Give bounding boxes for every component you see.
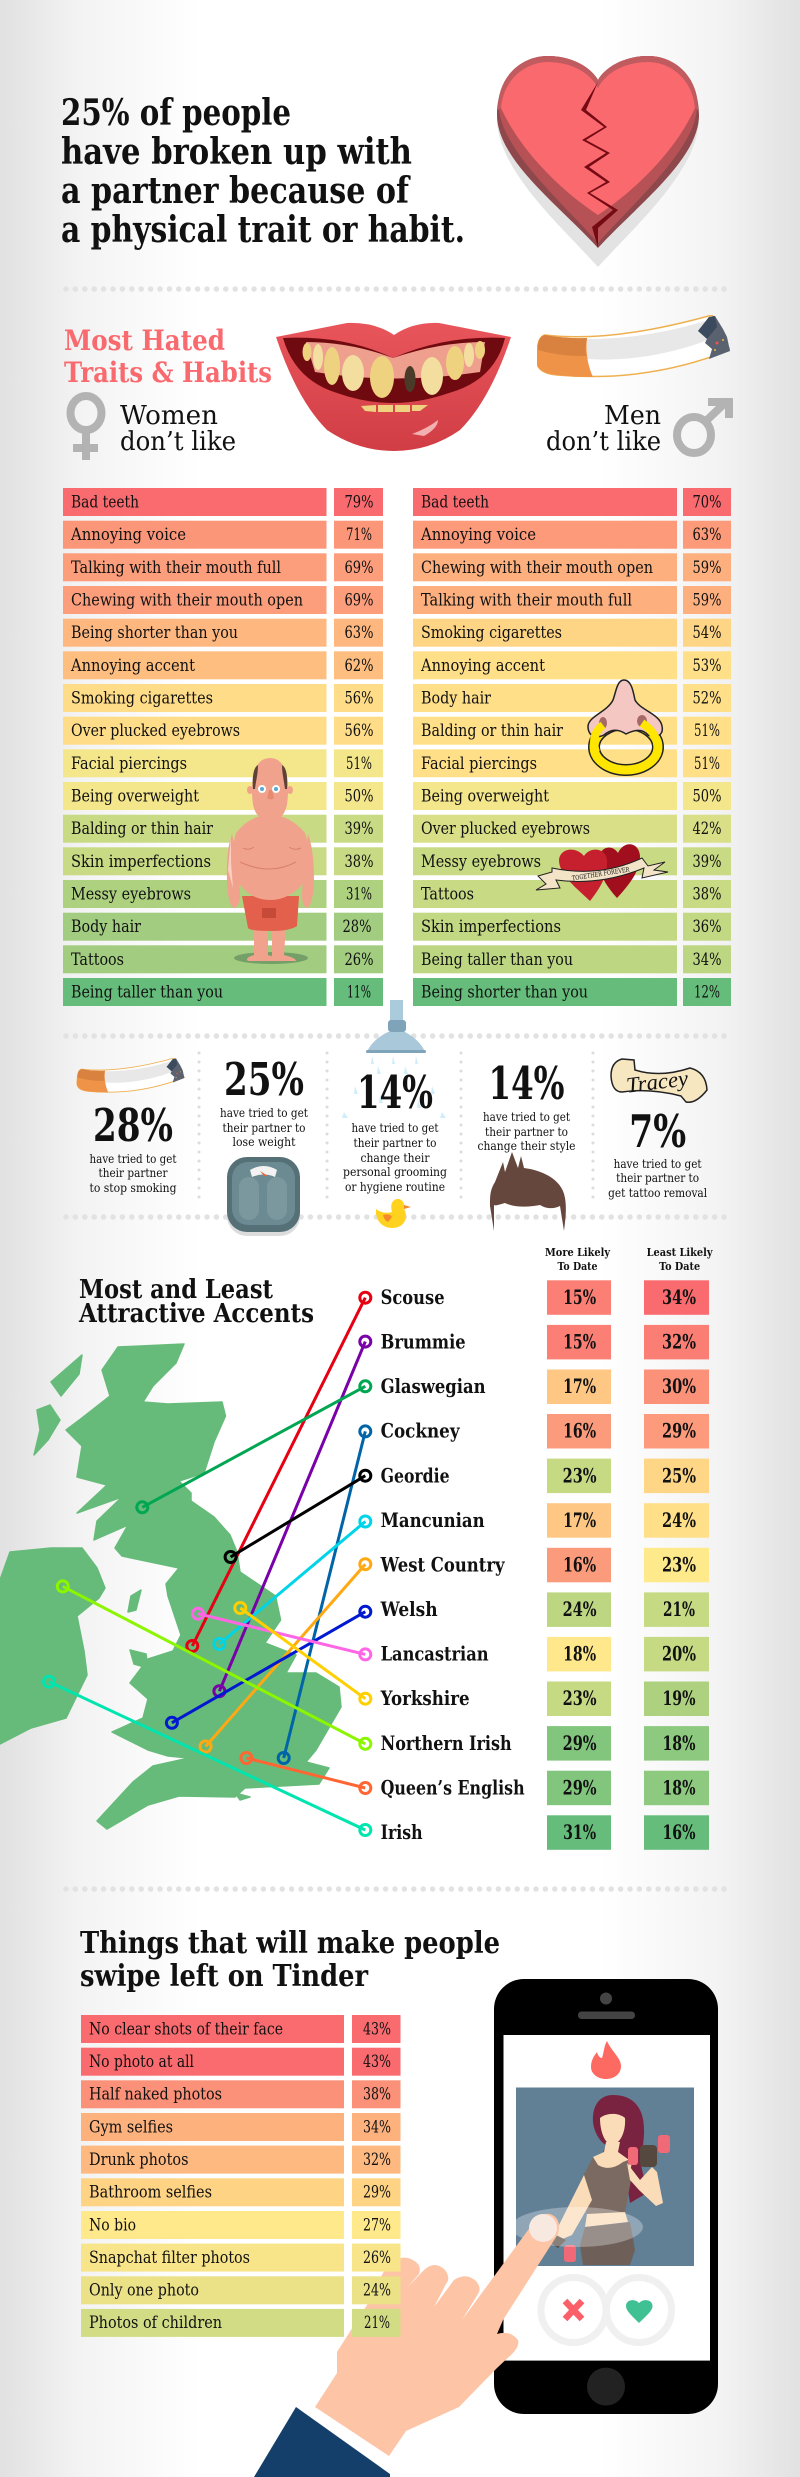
connector: Mancunian: [214, 1516, 371, 1650]
row: 34%: [692, 950, 722, 969]
accent row: Cockney: 16%: [563, 1420, 596, 1443]
row: [81, 2080, 400, 2108]
row: [81, 2146, 400, 2174]
icon: overweight balding man: [227, 758, 314, 964]
row: Balding or thin hair: [421, 721, 563, 740]
accent row: Northern Irish: Northern Irish: [381, 1731, 512, 1755]
row: Bad teeth: [71, 492, 139, 512]
title: have broken up with: [61, 131, 412, 173]
row: 11%: [347, 982, 371, 1002]
accent row: Brummie: 32%: [662, 1331, 696, 1354]
row: Annoying voice: [70, 525, 186, 544]
row: [81, 2178, 400, 2206]
section divider: [66, 1214, 728, 1220]
connector: Glaswegian: [137, 1381, 371, 1513]
row: Bathroom selfies: [89, 2183, 212, 2202]
stat: change style: have tried to get: [483, 1109, 570, 1124]
row: Chewing with their mouth open: [71, 590, 303, 610]
accent row: Cockney: [381, 1414, 709, 1448]
stat: change style: their partner to: [485, 1124, 568, 1139]
row: [63, 684, 383, 712]
icon: tinder flame: [591, 2041, 621, 2079]
heading: tinder: Things that will make people: [80, 1926, 500, 1961]
accent row: Queen's English: Queen’s English: [381, 1775, 525, 1799]
row: 21%: [364, 2313, 390, 2332]
column header: least likely: [647, 1246, 713, 1273]
row: Smoking cigarettes: [421, 623, 562, 642]
title: a partner because of: [61, 170, 411, 212]
section divider: [66, 286, 728, 292]
icon: hearts tattoo: [536, 844, 668, 901]
icon: pointing hand: [254, 2214, 559, 2477]
row: [81, 2048, 400, 2076]
row: Bad teeth: [421, 492, 489, 512]
icon: cigarette: [536, 315, 730, 377]
label: women don't like: [120, 401, 236, 457]
heading: tinder: swipe left on Tinder: [80, 1959, 369, 1994]
row: 24%: [363, 2281, 391, 2300]
accent row: Welsh: 24%: [563, 1598, 597, 1621]
row: 51%: [694, 721, 720, 740]
connector: Lancastrian: [192, 1608, 371, 1660]
stat: lose weight: have tried to get: [220, 1105, 308, 1120]
accent row: Geordie: Geordie: [381, 1463, 450, 1487]
row: [81, 2015, 400, 2043]
icon: female symbol: [70, 396, 102, 460]
row: 56%: [344, 721, 374, 740]
column header: least likely: Least Likely: [647, 1246, 713, 1259]
connector: Queen's English: [241, 1752, 371, 1794]
accent row: Yorkshire: Yorkshire: [380, 1686, 470, 1710]
row: Tattoos: [71, 950, 124, 969]
row: [63, 978, 383, 1006]
row: Talking with their mouth full: [421, 590, 632, 610]
accent row: Yorkshire: [380, 1682, 709, 1716]
heading: most hated traits: Traits & Habits: [64, 356, 272, 389]
row: 70%: [692, 492, 722, 512]
row: 59%: [692, 558, 722, 577]
stat: grooming: their partner to: [354, 1135, 436, 1150]
connector: Scouse: [187, 1292, 371, 1652]
icon: shower head: [342, 1000, 446, 1118]
accent row: Scouse: [381, 1280, 709, 1315]
row: 51%: [346, 754, 372, 773]
title: a physical trait or habit.: [61, 209, 465, 251]
row: 56%: [344, 688, 374, 708]
row: Facial piercings: [421, 754, 537, 773]
row: [63, 782, 383, 810]
row: [81, 2113, 400, 2141]
row: [413, 815, 731, 843]
row: 38%: [692, 884, 722, 904]
row: 34%: [363, 2117, 391, 2136]
stat: lose weight: their partner to: [222, 1120, 306, 1135]
row: 26%: [363, 2248, 391, 2267]
accent row: Queen's English: 18%: [662, 1776, 696, 1799]
row: Over plucked eyebrows: [421, 819, 590, 838]
row: 71%: [346, 525, 372, 544]
row: [413, 717, 731, 745]
icon: male symbol: [677, 402, 729, 453]
heading: accents: Most and Least: [79, 1274, 274, 1305]
stat: grooming: or hygiene routine: [345, 1179, 445, 1194]
row: 79%: [344, 492, 374, 512]
connector: Brummie: [214, 1336, 371, 1697]
row: 51%: [694, 754, 720, 773]
row: Skin imperfections: [421, 917, 561, 936]
icon: hair wig: [490, 1152, 566, 1231]
connector: Welsh: [166, 1606, 371, 1728]
accent row: Irish: [381, 1815, 709, 1850]
column header: least likely: To Date: [659, 1260, 700, 1273]
row: Annoying voice: [420, 525, 536, 544]
row: 63%: [692, 525, 722, 544]
stat: tattoo removal: get tattoo removal: [608, 1185, 707, 1200]
row: [413, 651, 731, 679]
accent row: Brummie: [381, 1325, 709, 1359]
row: [63, 651, 383, 679]
row: 26%: [344, 950, 374, 969]
stat: grooming: change their: [360, 1150, 430, 1165]
accent row: Glaswegian: [381, 1370, 709, 1404]
accent row: Geordie: 25%: [662, 1464, 696, 1487]
row: No bio: [89, 2215, 136, 2234]
button: reject: [541, 2278, 606, 2342]
accent row: Glaswegian: 17%: [563, 1375, 596, 1398]
label: women don't like: Women: [120, 401, 218, 431]
section divider: [66, 1886, 728, 1892]
accent row: Mancunian: Mancunian: [381, 1508, 485, 1532]
row: 38%: [344, 852, 374, 871]
row: 12%: [694, 982, 720, 1002]
row: [413, 749, 731, 777]
accent row: Yorkshire: 19%: [662, 1687, 696, 1710]
connector: Irish: [44, 1676, 371, 1836]
row: 43%: [363, 2019, 391, 2038]
accent row: Scouse: 15%: [563, 1286, 596, 1309]
row: 54%: [692, 623, 722, 642]
stat: grooming: 14%: [357, 1066, 433, 1119]
column dividers: [199, 1053, 593, 1202]
row: 39%: [344, 819, 374, 838]
accent row: Northern Irish: 29%: [563, 1732, 597, 1755]
accent row: West Country: 16%: [563, 1554, 596, 1576]
icon: rubber duck: [376, 1199, 411, 1228]
stat: stop smoking: 28%: [93, 1099, 173, 1152]
row: 31%: [346, 884, 372, 904]
icon: broken heart: [497, 56, 699, 267]
row: Facial piercings: [71, 754, 187, 773]
row: No clear shots of their face: [89, 2019, 283, 2038]
row: [63, 521, 383, 549]
row: Annoying accent: [420, 656, 545, 675]
accent row: Lancastrian: 18%: [563, 1643, 596, 1666]
row: [413, 945, 731, 973]
row: Balding or thin hair: [71, 819, 213, 838]
stat: lose weight: lose weight: [232, 1134, 296, 1149]
icon: nose with ring: [588, 680, 662, 770]
title: 25% of people: [61, 92, 291, 134]
accent row: West Country: West Country: [380, 1552, 506, 1576]
stat: lose weight: 25%: [224, 1053, 304, 1106]
row: Body hair: [421, 688, 491, 708]
stat: change style: change their style: [478, 1138, 576, 1153]
row: Chewing with their mouth open: [421, 558, 653, 577]
stat: tattoo removal: 7%: [629, 1105, 686, 1158]
stat: grooming: have tried to get: [352, 1120, 438, 1135]
row: Gym selfies: [89, 2117, 173, 2136]
row: 39%: [692, 852, 722, 871]
stat: grooming: [343, 1066, 447, 1194]
accent row: Lancastrian: Lancastrian: [381, 1642, 489, 1666]
row: [413, 847, 731, 875]
row: [81, 2309, 400, 2337]
row: 69%: [344, 558, 374, 577]
row: Talking with their mouth full: [71, 558, 281, 577]
connector: Yorkshire: [235, 1602, 371, 1704]
row: [413, 488, 731, 516]
accent row: Glaswegian: 30%: [662, 1375, 696, 1398]
accent row: Yorkshire: 23%: [563, 1687, 597, 1710]
row: [413, 586, 731, 614]
accent row: Cockney: 29%: [662, 1420, 696, 1443]
row: Messy eyebrows: [421, 852, 541, 871]
row: Smoking cigarettes: [71, 688, 213, 708]
row: [63, 913, 383, 941]
accent row: Welsh: [380, 1592, 709, 1627]
row: 29%: [363, 2183, 391, 2202]
heading: accents: Attractive Accents: [78, 1298, 314, 1329]
stat: stop smoking: have tried to get: [90, 1151, 176, 1166]
icon: bathroom scale: [227, 1157, 300, 1236]
swipe blur: [511, 2207, 643, 2247]
accent row: Irish: 31%: [563, 1821, 596, 1844]
accent row: Irish: 16%: [662, 1821, 696, 1844]
row: [63, 749, 383, 777]
row: 42%: [692, 819, 722, 838]
stat: stop smoking: [77, 1058, 184, 1195]
row: [63, 488, 383, 516]
row: 27%: [363, 2215, 391, 2234]
row: 32%: [363, 2150, 391, 2169]
row: [63, 586, 383, 614]
stat: tattoo removal: their partner to: [616, 1170, 699, 1185]
row: [413, 913, 731, 941]
icon: cigarette small: [77, 1058, 184, 1092]
row: [81, 2276, 400, 2304]
row: [63, 815, 383, 843]
row: Body hair: [71, 917, 141, 936]
accent row: Northern Irish: 18%: [662, 1732, 696, 1755]
row: [413, 619, 731, 647]
accent row: Mancunian: 17%: [563, 1509, 596, 1532]
row: [63, 880, 383, 908]
map: UK and Ireland: [0, 1344, 341, 1829]
row: No photo at all: [89, 2052, 194, 2071]
row: Being shorter than you: [421, 982, 588, 1002]
accent connectors: [44, 1292, 371, 1836]
title: [61, 92, 465, 251]
table: tinder: [81, 2015, 400, 2337]
row: Only one photo: [89, 2281, 199, 2300]
icon: smartphone: [494, 1979, 718, 2414]
column header: more likely: To Date: [558, 1260, 598, 1273]
stat: tattoo removal: [608, 1105, 707, 1200]
accent row: West Country: 23%: [662, 1554, 696, 1576]
row: Being taller than you: [421, 950, 573, 969]
icon: bad teeth mouth: [276, 323, 511, 451]
row: 36%: [692, 917, 722, 936]
row: [81, 2211, 400, 2239]
row: 63%: [344, 623, 374, 642]
accent row: Scouse: Scouse: [381, 1285, 445, 1309]
row: Photos of children: [89, 2313, 222, 2332]
row: Over plucked eyebrows: [71, 721, 240, 740]
accent row: Welsh: 21%: [663, 1598, 695, 1621]
stat: change style: 14%: [488, 1057, 564, 1110]
accent row: Welsh: Welsh: [380, 1597, 438, 1621]
connector: Cockney: [278, 1426, 371, 1764]
stat: stop smoking: their partner: [98, 1165, 168, 1180]
row: [413, 782, 731, 810]
label: women don't like: don’t like: [120, 427, 236, 457]
table: men don't like: [413, 488, 731, 1006]
button: like: [606, 2278, 672, 2342]
row: 50%: [344, 786, 374, 806]
row: 52%: [692, 688, 722, 708]
row: Tattoos: [421, 884, 474, 904]
row: [63, 945, 383, 973]
row: 59%: [692, 590, 722, 610]
row: [413, 978, 731, 1006]
accent row: Geordie: [381, 1459, 709, 1493]
accent row: Lancastrian: 20%: [662, 1643, 696, 1666]
row: [63, 619, 383, 647]
stat: tattoo removal: have tried to get: [614, 1156, 702, 1171]
heading: most hated traits: [64, 324, 272, 389]
label: men don't like: don’t like: [546, 427, 661, 457]
row: 43%: [363, 2052, 391, 2071]
column header: more likely: [545, 1246, 611, 1273]
accent row: Queen's English: [381, 1771, 709, 1805]
row: 50%: [692, 786, 722, 806]
stat: stop smoking: to stop smoking: [90, 1180, 176, 1195]
accent row: Lancastrian: [381, 1637, 709, 1671]
accent row: Mancunian: [381, 1503, 709, 1538]
row: [63, 847, 383, 875]
row: Being overweight: [71, 786, 199, 806]
column header: more likely: More Likely: [545, 1246, 611, 1259]
accent row: Queen's English: 29%: [563, 1776, 597, 1799]
row: [413, 684, 731, 712]
accent row: Geordie: 23%: [563, 1464, 597, 1487]
accent row: Cockney: Cockney: [381, 1419, 461, 1443]
row: [63, 553, 383, 581]
connector: West Country: [200, 1559, 371, 1752]
row: Being shorter than you: [71, 623, 238, 642]
accents table: [380, 1280, 709, 1850]
section divider: [66, 1033, 728, 1039]
row: 53%: [692, 656, 722, 675]
label: men don't like: Men: [604, 401, 661, 431]
heading: most hated traits: Most Hated: [64, 324, 225, 357]
accent row: Northern Irish: [381, 1726, 709, 1761]
row: [413, 880, 731, 908]
accent row: Mancunian: 24%: [662, 1509, 696, 1532]
stat: grooming: personal grooming: [343, 1164, 447, 1179]
row: 38%: [363, 2085, 391, 2104]
row: Messy eyebrows: [71, 884, 191, 904]
stat: change style: [478, 1057, 576, 1153]
row: Half naked photos: [89, 2085, 222, 2104]
accent row: Irish: Irish: [381, 1820, 423, 1844]
row: Being taller than you: [71, 982, 223, 1002]
row: [63, 717, 383, 745]
heading: accents: [78, 1274, 314, 1329]
row: Skin imperfections: [71, 852, 211, 871]
stat: lose weight: [220, 1053, 308, 1149]
row: Being overweight: [421, 786, 549, 806]
icon: tracey tattoo scroll: [611, 1059, 707, 1102]
row: Snapchat filter photos: [89, 2248, 250, 2267]
accent row: West Country: [380, 1548, 709, 1582]
row: Drunk photos: [89, 2150, 188, 2169]
label: men don't like: [546, 401, 661, 457]
table: women don't like: [63, 488, 383, 1006]
row: 69%: [344, 590, 374, 610]
row: 62%: [344, 656, 374, 675]
heading: tinder: [80, 1926, 500, 1994]
row: [413, 521, 731, 549]
icon: tracey tattoo scroll: Tracey: [625, 1065, 690, 1098]
row: 28%: [342, 917, 372, 936]
accent row: Brummie: 15%: [563, 1331, 596, 1354]
icon: hearts tattoo: TOGETHER FOREVER: [571, 865, 631, 883]
connector: Geordie: [225, 1470, 371, 1562]
accent row: Brummie: Brummie: [381, 1330, 466, 1354]
row: Annoying accent: [70, 656, 195, 675]
connector: Northern Irish: [57, 1581, 371, 1749]
profile photo: [516, 2088, 694, 2266]
row: [413, 553, 731, 581]
accent row: Glaswegian: Glaswegian: [381, 1374, 486, 1398]
accent row: Scouse: 34%: [662, 1286, 696, 1309]
row: [81, 2244, 400, 2272]
